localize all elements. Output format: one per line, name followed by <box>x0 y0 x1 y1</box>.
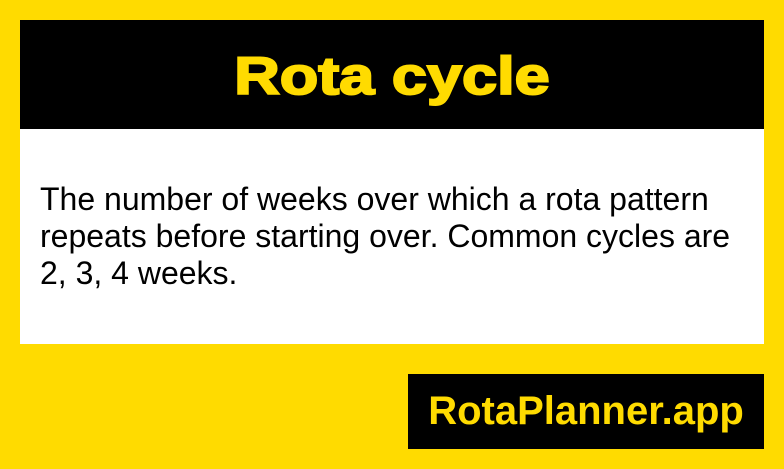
definition text: 2, 3, 4 weeks. <box>40 255 237 291</box>
definition text: The number of weeks over which a rota pattern <box>40 181 709 217</box>
brand name: RotaPlanner.app <box>428 389 744 433</box>
panel: definition <box>20 129 764 344</box>
definition text <box>40 181 730 291</box>
brand badge <box>408 374 764 449</box>
definition text: repeats before starting over. Common cycles are <box>40 218 730 254</box>
title: Rota cycle <box>234 47 550 106</box>
header band <box>20 20 764 129</box>
